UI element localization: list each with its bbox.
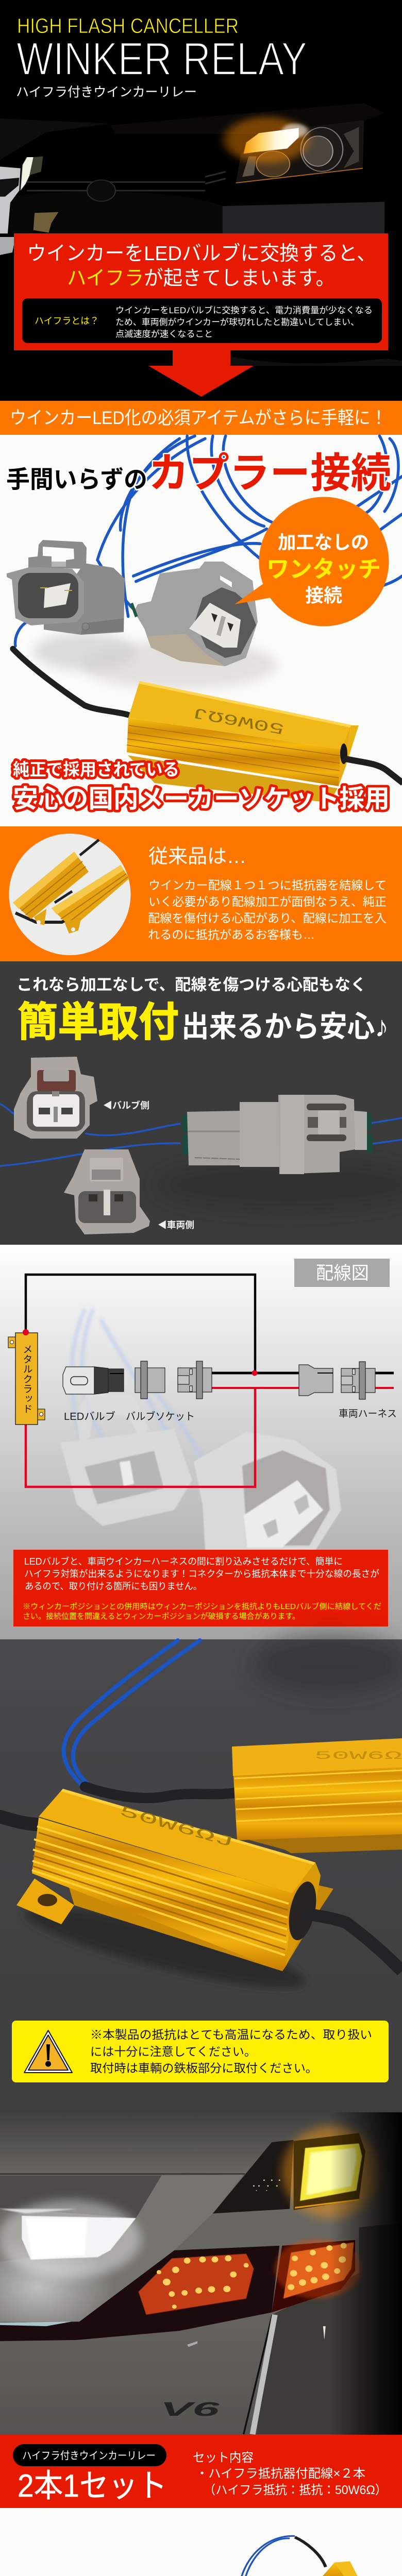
heading: coupler connection: カプラー接続 — [148, 450, 391, 496]
connector: vehicle side — [64, 1149, 150, 1234]
badge: wiring diagram: 配線図 — [316, 1263, 369, 1283]
component: bulb socket — [135, 1361, 212, 1399]
warning text: 取付時は車輌の鉄板部分に取付ください。 — [90, 2061, 317, 2075]
label: bulb socket: バルブソケット — [126, 1410, 195, 1422]
caution text: ※ウィンカーポジションとの併用時はウィンカーポジションを抵抗よりもLEDバルブ側に結線してくだ — [23, 1602, 381, 1611]
explanation text: ハイフラ対策が出来るようになります！コネクターから抵抗本体まで十分な線の長さが — [24, 1569, 379, 1579]
explanation text: LEDバルブと、車両ウインカーハーネスの間に割り込みさせるだけで、簡単に — [24, 1556, 343, 1567]
photo: car front at night — [0, 103, 384, 233]
photo: output wire — [300, 1913, 402, 1971]
product pill: ハイフラ付きウインカーリレー — [22, 2450, 156, 2462]
caution text: さい。接続位置を間違えるとウィンカーポジションが破損する場合があります。 — [23, 1612, 300, 1621]
icon: warning triangle — [24, 2030, 72, 2073]
panel: easy installation — [0, 961, 402, 1245]
product pill — [13, 2444, 166, 2466]
text: conventional product description — [148, 878, 387, 941]
photo: ghost connectors — [60, 1309, 341, 1550]
connector: mated pair — [182, 1095, 373, 1174]
badge: wiring diagram — [294, 1259, 390, 1287]
label: LED bulb: LEDバルブ — [64, 1410, 115, 1422]
set count: 2本1セット — [18, 2468, 167, 2504]
heading: no processing needed: これなら加工なしで、配線を傷つける心配もなく — [16, 976, 366, 994]
text: conventional product description: ウインカー配線１つ１つに抵抗器を結線して — [148, 878, 387, 892]
callout: one-touch speech bubble: 加工なしの — [278, 532, 369, 553]
definition text: ため、車両側がウインカーが球切れしたと勘違いしてしまい、 — [115, 317, 359, 327]
set contents list: （ハイフラ抵抗：抵抗：50W6Ω） — [204, 2483, 387, 2497]
connector: bulb side — [14, 1057, 97, 1139]
callout: wiring explanation — [13, 1550, 388, 1626]
junction dot — [252, 1370, 258, 1376]
banner: set contents — [0, 2435, 402, 2508]
photo circle: conventional resistors — [9, 834, 131, 955]
diagram: circuit lines — [26, 1275, 394, 1487]
component: metal clad resistor — [8, 1329, 45, 1425]
panel: hero night photo with title — [0, 0, 402, 401]
definition text: ウインカーをLEDバルブに交換すると、電力消費量が少なくなる — [115, 305, 373, 315]
component: vehicle harness connectors — [299, 1362, 375, 1399]
photo: rear resistor — [232, 1738, 402, 1853]
caution text — [23, 1602, 381, 1621]
explanation text — [24, 1556, 379, 1591]
set contents list: セット内容 — [193, 2451, 254, 2465]
label: bulb side: ◀バルブ側 — [103, 1100, 149, 1111]
heading: HIGH FLASH CANCELLER: HIGH FLASH CANCELLER — [17, 14, 239, 38]
connector: male — [7, 540, 125, 635]
label: vehicle side: ◀車両側 — [158, 1220, 194, 1230]
heading: WINKER RELAY: WINKER RELAY — [16, 33, 307, 85]
heading: conventional product: 従来品は… — [148, 846, 246, 868]
caption: domestic socket: 安心の国内メーカーソケット採用 — [13, 785, 390, 813]
explanation text: あるので、取り付ける箇所にも困りません。 — [25, 1581, 202, 1591]
definition term: ハイフラとは？ — [35, 316, 99, 326]
callout: heat warning — [12, 2021, 389, 2082]
photo: wires, connectors and resistor — [7, 436, 402, 803]
callout: one-touch speech bubble — [234, 497, 389, 626]
panel: rear lamp photo: V6 — [160, 2398, 220, 2420]
component: metal clad resistor: メタルクラッド — [22, 1344, 32, 1413]
warning text — [90, 2028, 372, 2075]
resistor: gold: 50W6ΩJ — [192, 703, 286, 737]
photo: rear resistor: 50W6Ω — [314, 1750, 402, 1762]
wires: blue — [0, 1104, 402, 1166]
photo: blue wires — [64, 1640, 200, 1788]
callout headline line 1: ウインカーをLEDバルブに交換すると、 — [27, 243, 376, 265]
subtitle: ハイフラ付きウインカーリレー — [16, 85, 197, 99]
callout: one-touch speech bubble: ワンタッチ — [266, 556, 381, 582]
panel: conventional product comparison — [0, 826, 402, 961]
heading: easy install — [18, 999, 389, 1045]
arrow: down — [148, 350, 254, 397]
caption: domestic socket — [13, 760, 390, 813]
panel: resistor close-up photo — [0, 1633, 402, 2112]
definition box — [22, 298, 382, 343]
panel: coupler connection photo — [0, 435, 402, 826]
definition text — [115, 305, 373, 339]
panel: wiring diagram — [0, 1245, 402, 1639]
text: conventional product description: 配線を傷付ける心配があり、配線に加工を入 — [148, 911, 387, 925]
wire: black heat-shrink — [13, 649, 128, 715]
set contents list — [193, 2451, 387, 2497]
callout: red problem box — [14, 233, 388, 350]
definition text: 点滅速度が速くなること — [115, 329, 213, 339]
heading: easy install: 出来るから安心♪ — [181, 1010, 389, 1043]
heading: coupler connection — [6, 450, 391, 496]
photo: front resistor: 50W6ΩJ — [118, 1804, 236, 1852]
panel: rear lamp photo — [0, 2112, 402, 2435]
label: vehicle harness: 車両ハーネス — [339, 1408, 397, 1419]
text: conventional product description: れるのに抵抗があるお客様も… — [148, 928, 315, 941]
caption: domestic socket: 純正で採用されている — [13, 760, 179, 779]
callout: one-touch speech bubble: 接続 — [305, 585, 342, 606]
connector: female — [130, 562, 258, 666]
resistor: gold — [127, 681, 402, 803]
warning text: には十分に注意してください。 — [90, 2045, 256, 2058]
text: conventional product description: いく必要があり配線加工が面倒なうえ、純正 — [148, 895, 387, 908]
callout headline line 2: ハイフラが起きてしまいます。 — [67, 267, 335, 290]
banner: orange tagline — [0, 401, 402, 435]
heading: coupler connection: 手間いらずの — [6, 466, 147, 493]
panel: product set photo — [0, 2508, 402, 2576]
component: LED bulb — [63, 1367, 124, 1394]
photo: car lower bumper — [0, 237, 402, 366]
set contents list: ・ハイフラ抵抗器付配線×２本 — [196, 2467, 365, 2481]
wires: black heat-shrink — [164, 2537, 386, 2576]
heading: easy install: 簡単取付 — [18, 999, 179, 1045]
photo: front resistor — [16, 1789, 333, 2003]
warning text: ※本製品の抵抗はとても高温になるため、取り扱い — [90, 2028, 372, 2041]
photo: black wires — [0, 1787, 235, 1824]
resistor: upper — [309, 2561, 389, 2576]
wires: blue harness — [68, 2536, 387, 2576]
